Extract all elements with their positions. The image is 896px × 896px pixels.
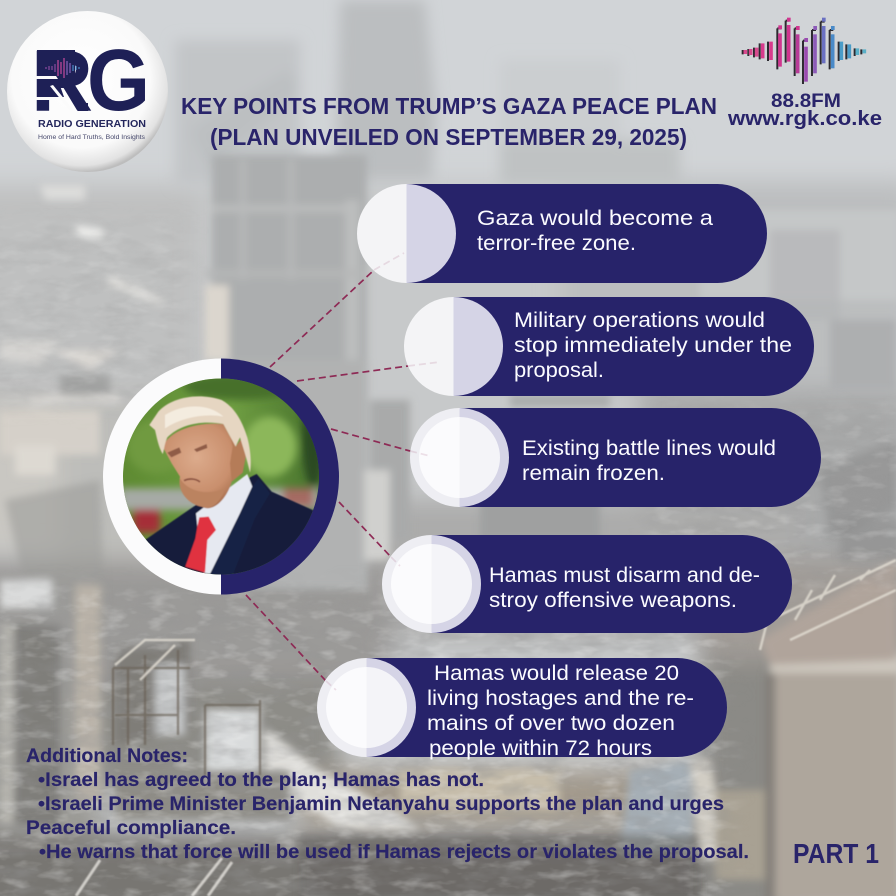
suit [146, 474, 313, 574]
portrait: Donald Trump [123, 378, 319, 574]
additional notes: •He warns that force will be used if Hamas rejects or violates the proposal. [39, 842, 749, 863]
text: Gaza would become a [477, 207, 713, 230]
text: mains of over two dozen [427, 712, 675, 735]
station frequency and website: www.rgk.co.ke [727, 108, 882, 130]
circle [404, 297, 503, 396]
logo name: RADIO GENERATION [38, 119, 146, 130]
icon: radio sound wave [743, 18, 864, 84]
part label: PART 1 [793, 838, 879, 869]
pill [366, 658, 727, 757]
text: Hamas would release 20 [434, 662, 679, 685]
brows, eyes and mouth [167, 444, 207, 457]
bottom-left structures [0, 580, 52, 608]
point 1: terror-free zone [357, 184, 767, 283]
scaffolding and bent steel details [76, 560, 896, 896]
bottom-middle debris [620, 758, 700, 855]
upper-right haze buildings [700, 210, 896, 300]
circle [357, 184, 456, 283]
text [522, 437, 776, 485]
additional notes: Additional Notes: [26, 746, 188, 767]
additional notes: Peaceful compliance. [26, 818, 236, 839]
circle [317, 658, 416, 757]
additional notes: •Israel has agreed to the plan; Hamas has not. [38, 770, 484, 791]
left rubble patches [40, 185, 85, 200]
text: people within 72 hours [429, 737, 652, 760]
text [489, 564, 760, 612]
rubble texture, softly masked [0, 259, 896, 896]
text: stroy offensive weapons. [489, 589, 737, 612]
station frequency and website [727, 90, 882, 130]
neck and face [164, 423, 234, 509]
circle [410, 408, 509, 507]
hair [149, 396, 251, 473]
circle [382, 535, 481, 633]
logo badge: Radio Generation [7, 11, 168, 172]
station frequency and website: 88.8FM [771, 90, 841, 112]
right-side building [770, 672, 896, 896]
point 2: military operations stop [404, 297, 814, 396]
logo mark R.G: R [31, 33, 93, 130]
text: Existing battle lines would [522, 437, 776, 460]
title: KEY POINTS FROM TRUMP’S GAZA PEACE PLAN [181, 93, 717, 119]
text: remain frozen. [522, 462, 665, 485]
distant tower and buildings [175, 0, 680, 185]
lapel [210, 478, 270, 574]
tie [185, 517, 216, 573]
badge disc [7, 11, 168, 172]
text: proposal. [514, 359, 604, 382]
text: stop immediately under the [514, 334, 792, 357]
additional notes [26, 746, 749, 863]
pill [406, 184, 767, 283]
text: Military operations would [514, 309, 765, 332]
text [477, 207, 713, 255]
point 3: battle lines frozen [410, 408, 821, 507]
text [514, 309, 792, 382]
shirt [196, 474, 252, 574]
text: Hamas must disarm and de- [489, 564, 760, 587]
title: (PLAN UNVEILED ON SEPTEMBER 29, 2025) [210, 124, 687, 150]
pill [460, 408, 821, 507]
title [181, 93, 717, 150]
portrait ring [103, 358, 339, 594]
text: living hostages and the re- [427, 687, 694, 710]
central bombed building [212, 155, 367, 360]
additional notes: •Israeli Prime Minister Benjamin Netanyahu supports the plan and urges [38, 794, 724, 815]
dashed connector lines [246, 270, 410, 681]
text: terror-free zone. [477, 232, 636, 255]
logo mark R.G [31, 32, 150, 130]
pill [432, 535, 792, 633]
point 5: hostage release [317, 658, 727, 760]
logo tagline: Home of Hard Truths, Bold Insights [38, 134, 146, 141]
point 4: Hamas must disarm [382, 535, 792, 633]
logo mark R.G: G [87, 32, 150, 129]
text [427, 662, 694, 760]
faint connector continuation over circles [326, 253, 440, 690]
pill [454, 297, 814, 396]
